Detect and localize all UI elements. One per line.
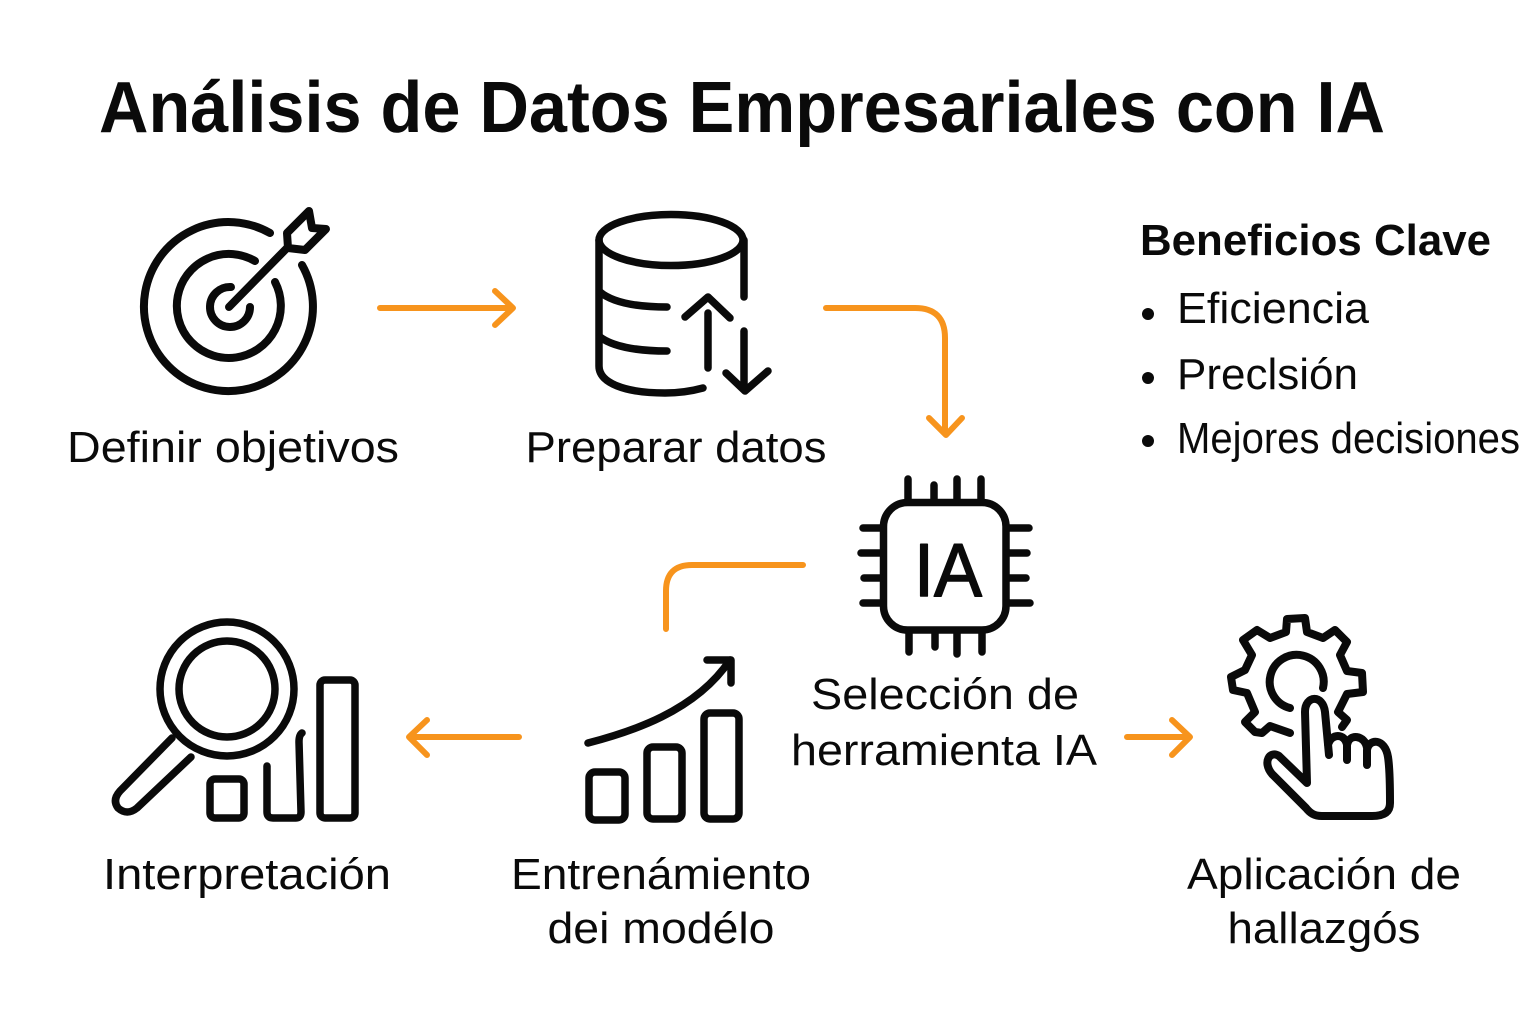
label: entrenamiento del modelo: dei modélo bbox=[548, 904, 774, 953]
icon: gear with hand bbox=[1231, 618, 1390, 816]
label: aplicacion de hallazgos bbox=[1187, 850, 1461, 953]
label: entrenamiento del modelo bbox=[511, 850, 811, 953]
title: Análisis de Datos Empresariales con IA bbox=[99, 68, 1385, 148]
icon: magnifier with bars bbox=[115, 622, 355, 818]
benefits heading: Beneficios Clave bbox=[1140, 216, 1491, 265]
label: aplicacion de hallazgos: hallazgós bbox=[1228, 904, 1420, 953]
arrow: herramienta to entrenamiento bbox=[666, 565, 803, 629]
icon: target with arrow bbox=[144, 211, 326, 391]
label: interpretacion: Interpretación bbox=[103, 850, 391, 899]
label: seleccion de herramienta: herramienta IA bbox=[791, 726, 1098, 775]
arrow: entrenamiento to interpretacion bbox=[409, 720, 519, 755]
icon: AI chip bbox=[861, 479, 1030, 654]
arrow: objetivos to datos bbox=[380, 291, 513, 325]
label: aplicacion de hallazgos: Aplicación de bbox=[1187, 850, 1461, 899]
panel: benefits bbox=[1140, 216, 1520, 463]
label: entrenamiento del modelo: Entrenámiento bbox=[511, 850, 811, 899]
benefit: precision: Preclsión bbox=[1177, 350, 1358, 399]
arrow: herramienta to aplicacion bbox=[1127, 720, 1190, 755]
label: seleccion de herramienta bbox=[791, 670, 1098, 775]
icon: AI chip: IA bbox=[914, 528, 982, 612]
label: preparar datos: Preparar datos bbox=[526, 423, 826, 472]
arrow: datos to herramienta bbox=[826, 308, 962, 435]
icon: growth chart bbox=[588, 660, 739, 820]
icon: database with arrows bbox=[599, 214, 768, 393]
label: seleccion de herramienta: Selección de bbox=[811, 670, 1079, 719]
label: definir objetivos: Definir objetivos bbox=[67, 423, 399, 472]
benefit: efficiency: Eficiencia bbox=[1177, 284, 1370, 333]
